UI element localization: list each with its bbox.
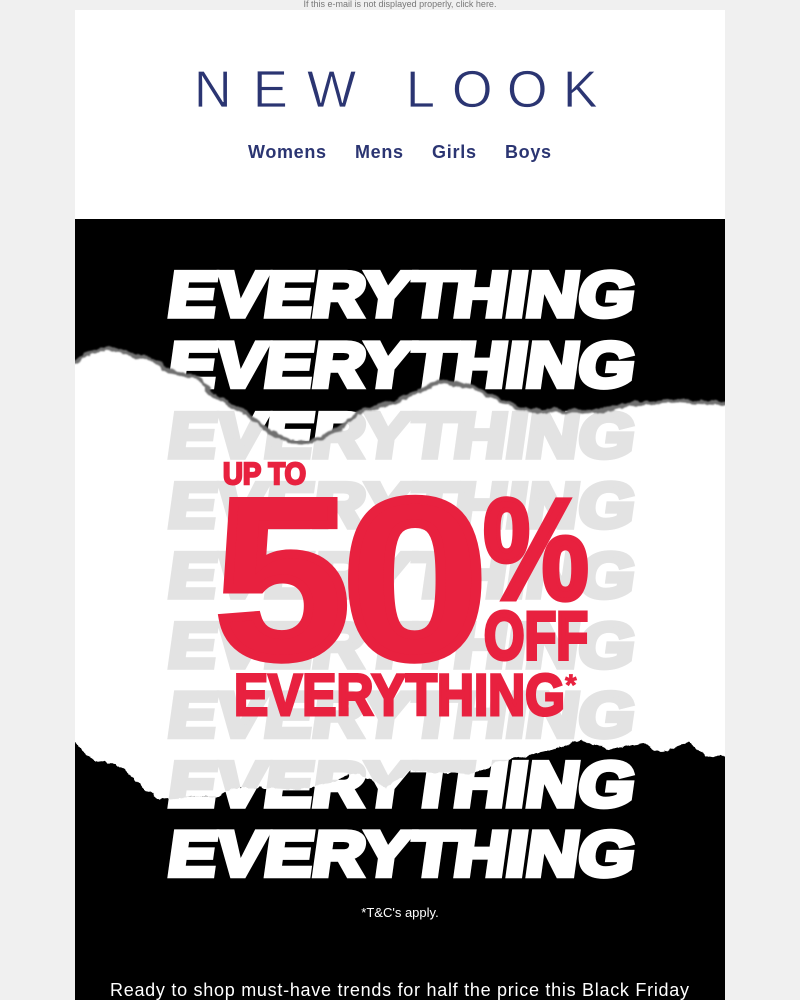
navigation: Boys xyxy=(505,142,551,162)
torn paper sheet xyxy=(60,348,740,800)
torn paper shadow edge xyxy=(60,348,740,443)
up to: UP TO xyxy=(223,456,306,491)
navigation: Girls xyxy=(432,142,476,162)
logo: New Look: NEWLOOK xyxy=(194,61,598,119)
terms note: *T&C's apply. xyxy=(361,905,439,920)
intro copy: Ready to shop must-have trends for half the price this Black Friday xyxy=(110,980,689,1000)
asterisk: * xyxy=(565,669,577,702)
grey repeated EVERYTHING text xyxy=(164,400,640,820)
digit 5: 5 xyxy=(216,452,349,705)
panel: header xyxy=(75,10,725,219)
percent sign: % xyxy=(483,469,589,630)
navigation: Mens xyxy=(355,142,403,162)
navigation xyxy=(248,142,551,162)
everything: EVERYTHING xyxy=(234,663,565,728)
offer headline xyxy=(216,452,589,728)
navigation: Womens xyxy=(248,142,326,162)
off: OFF xyxy=(484,598,588,674)
digit 0: 0 xyxy=(343,452,487,705)
white repeated EVERYTHING text xyxy=(164,259,640,889)
panel: black hero xyxy=(60,219,740,1000)
